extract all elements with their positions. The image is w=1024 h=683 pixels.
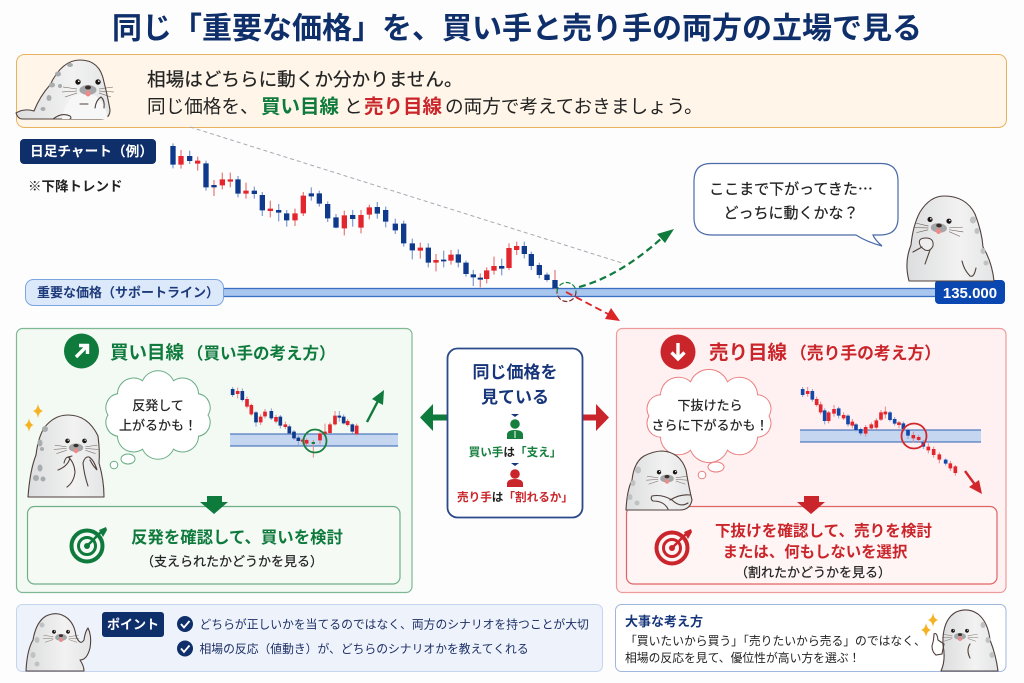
buyer action text: 反発を確認して、買いを検討 [131,528,343,547]
thought bubble: buyer [106,371,210,469]
thought bubble: seller: 下抜けたら [677,398,743,413]
intro text: 同じ価格を、 [147,96,259,117]
intro text: と [344,96,363,117]
box: seller action [626,496,997,584]
mindset text [625,634,926,665]
icon: up arrow badge [64,334,99,368]
badge: point: ポイント [107,617,159,632]
icon: down arrow badge [660,334,696,370]
icon: seal excited [24,404,104,497]
thought bubble: buyer: 上がるかも！ [119,418,197,433]
intro text: 売り目線 [364,96,443,118]
seller action text: 下抜けを確認して、売りを検討 [715,521,932,540]
label: key price [26,280,224,306]
icon: target [72,527,107,562]
arrow: downward scenario [566,292,620,321]
mini chart: rebound [230,387,398,458]
icon: target [656,529,692,564]
mindset heading: 大事な考え方 [625,614,703,629]
support band [222,288,938,296]
speech bubble: どっちに動くかな？ [723,205,859,222]
icon: seal thinking [907,196,994,281]
arrow: upward scenario [579,229,674,287]
arrow: down to seller action [797,496,825,514]
badge: point [102,612,164,637]
panel: points [16,604,602,672]
icon: seal thumbs up [921,610,998,671]
intro text: 相場はどちらに動くか分かりません。 [147,69,463,90]
circle: decision point [557,282,576,302]
label: key price: 重要な価格（サポートライン） [37,285,219,300]
panel: center comparison [420,348,609,518]
point 1: どちらが正しいかを当てるのではなく、両方のシナリオを持つことが大切 [200,618,589,632]
label: price value [935,280,1005,304]
thought bubble: seller: さらに下がるかも！ [651,418,769,433]
note: downtrend: ※下降トレンド [28,178,122,194]
intro text: の両方で考えておきましょう。 [445,96,703,117]
heading: seller view: （売り手の考え方） [790,343,941,363]
box: seller action: （割れたかどうかを見る） [735,565,891,580]
candlestick chart [173,143,555,289]
icon: seal resting [16,60,114,119]
label: price value: 135.000 [943,285,997,302]
arrow: to buyer view [420,404,447,431]
mini chart: breakdown [800,387,982,494]
title: 同じ「重要な価格」を、買い手と売り手の両方の立場で見る [112,12,922,46]
label: daily chart: 日足チャート（例） [30,144,153,159]
speech bubble [694,164,898,246]
panel: buyer view [16,328,412,592]
icon: seal arms crossed [626,451,692,510]
center heading: 同じ価格を [472,363,558,382]
label: daily chart [20,139,156,164]
heading: buyer view: （買い手の考え方） [187,343,336,363]
box: buyer action [28,496,400,584]
box: buyer action: （支えられたかどうかを見る） [141,554,323,569]
center heading: 見ている [481,388,549,407]
arrow: down to buyer action [200,496,228,514]
intro text [147,69,703,118]
panel: key mindset [616,604,1006,672]
icon: seller person [507,463,523,487]
intro text: 買い目線 [261,96,340,118]
label: seller: 売り手は「割れるか」 [457,490,573,504]
point 2: 相場の反応（値動き）が、どちらのシナリオかを教えてくれる [200,642,529,656]
icon: seal waving [26,614,91,671]
thought bubble: buyer: 反発して [132,398,184,413]
trend line [190,127,622,263]
mindset text: 相場の反応を見て、優位性が高い方を選ぶ！ [625,651,860,665]
thought bubble: seller [647,369,771,479]
arrow: break down [965,471,982,494]
panel: seller view [616,328,1006,592]
arrow: to seller view [583,404,609,431]
heading: seller view: 売り目線 [709,342,787,364]
label: buyer: 買い手は「支え」 [469,445,561,459]
icon: buyer person [507,414,523,439]
center heading [472,363,558,407]
mindset text: 「買いたいから買う」「売りたいから売る」のではなく、 [625,634,926,648]
heading: buyer view: 買い目線 [110,342,184,363]
box: seller action: または、何もしないを選択 [723,542,908,561]
panel: intro banner [16,54,1006,128]
speech bubble: ここまで下がってきた… [709,178,873,199]
arrow: rebound up [367,390,384,422]
